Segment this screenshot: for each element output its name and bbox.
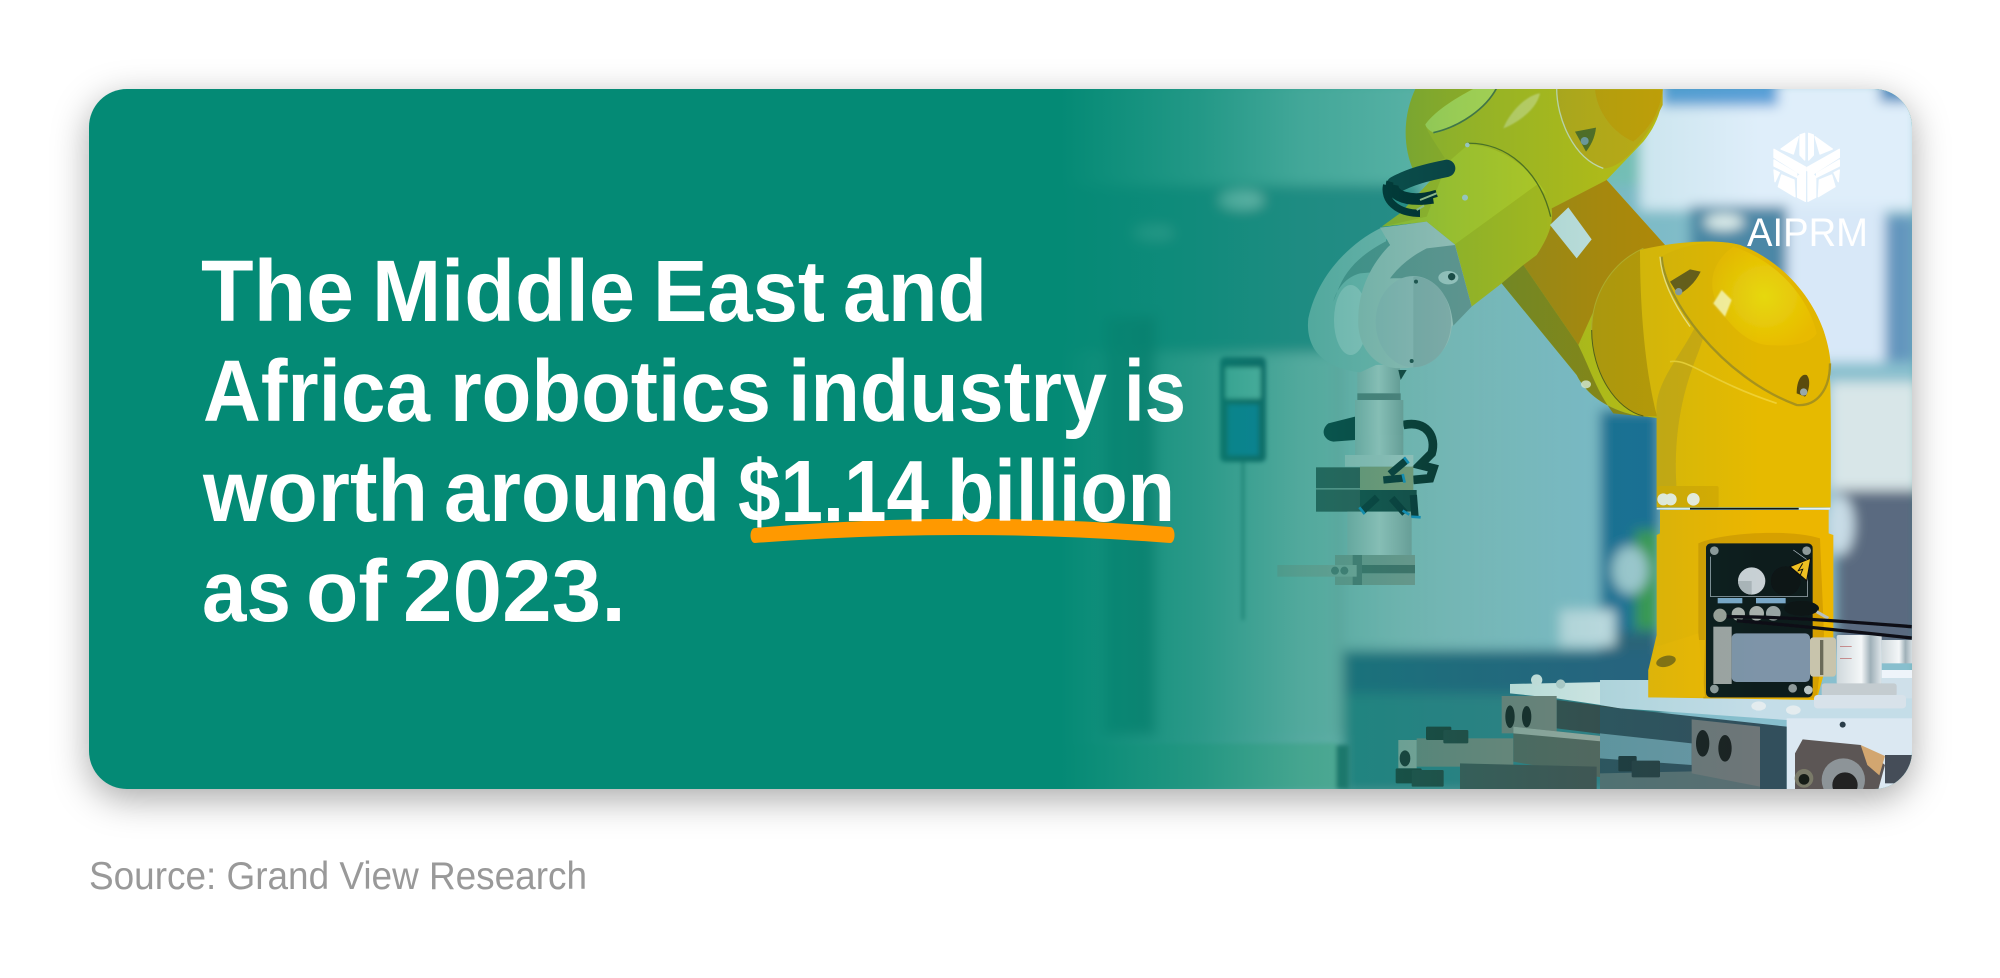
headline line 2: robotics (450, 343, 771, 440)
headline line 1: East (653, 243, 825, 340)
plate and screws (1657, 486, 1719, 507)
white label (1550, 207, 1592, 258)
lower forearm and main body of the yellow robot arm (1382, 85, 1665, 418)
headline line 3 (202, 443, 1175, 540)
headline line 2 (203, 343, 1186, 440)
black panel (1706, 543, 1813, 697)
headline line 4: of (306, 543, 388, 640)
elbow lower body (1592, 241, 1831, 509)
AIPRM logo (1747, 133, 1868, 255)
dark side of upper joint (1406, 89, 1472, 168)
orange underline highlight (750, 519, 1174, 543)
green gradient overlay (990, 89, 1712, 789)
headline line 1: The (201, 243, 354, 340)
top disc (1426, 89, 1495, 134)
casing top face (1382, 144, 1547, 244)
elbow side circle (1592, 248, 1657, 416)
headline line 2: Africa (203, 343, 431, 440)
source note: Source: Grand View Research (89, 855, 587, 898)
right round cap of upper joint (1557, 85, 1663, 168)
metal wrist joint (1308, 222, 1472, 400)
headline line 1: and (843, 243, 987, 340)
elbow silhouette (1640, 241, 1831, 507)
gripper tool assembly (1277, 400, 1433, 585)
card background with drop shadow (89, 89, 1912, 789)
headline (201, 243, 1186, 640)
logo mark (1774, 133, 1839, 201)
robot base with control panel (1648, 510, 1912, 708)
cap body (1662, 242, 1831, 405)
headline line 3: $1.14 (738, 443, 929, 540)
highlight speck (1503, 93, 1540, 128)
black cables (1727, 617, 1912, 638)
headline line 2: is (1124, 343, 1186, 440)
headline line 2: industry (788, 343, 1107, 440)
forearm underside strap (1502, 265, 1660, 418)
headline line 1 (201, 243, 987, 340)
casing lower face (1455, 244, 1534, 259)
shadow strip (1656, 328, 1703, 504)
table and connector right part (1600, 640, 1915, 802)
headline line 3: worth (202, 443, 428, 540)
photo panel: robot arm with green fade (1090, 89, 1912, 789)
casing seam (1466, 143, 1551, 217)
forearm dark side (1523, 180, 1665, 345)
headline line 1: Middle (372, 243, 635, 340)
upper arm silhouette (1382, 85, 1665, 418)
blurred teach pendant (1212, 355, 1350, 789)
headline line 4: as (202, 543, 291, 640)
blurred factory background (1090, 89, 1912, 789)
table and fixtures left part (1396, 674, 1623, 790)
headline line 4 (202, 543, 626, 640)
logo wordmark: AIPRM (1747, 211, 1868, 255)
headline line 3: around (444, 443, 720, 540)
headline line 4: 2023. (403, 543, 626, 640)
headline line 3: billion (947, 443, 1175, 540)
grey connector housing (1713, 627, 1732, 684)
connector row (1713, 609, 1727, 622)
cable bundle on the arm (1386, 143, 1470, 213)
